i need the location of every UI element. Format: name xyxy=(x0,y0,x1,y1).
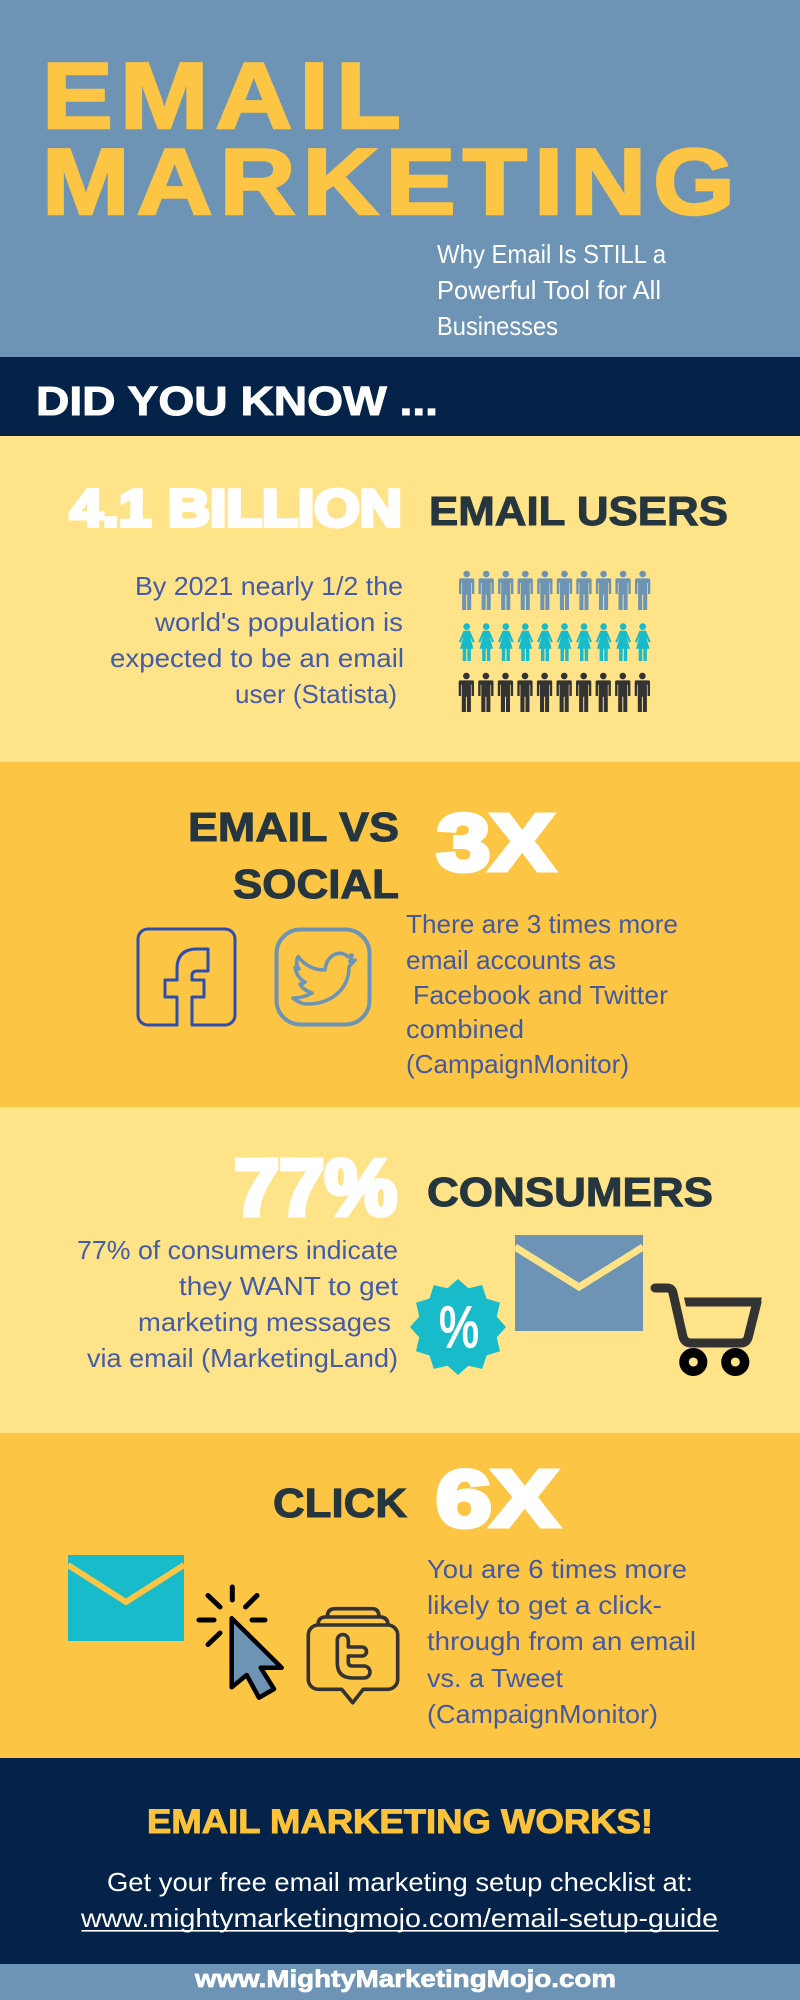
heading: email marketing works: EMAIL MARKETING WORKS! xyxy=(147,1803,653,1841)
icon: row of men xyxy=(459,571,650,610)
body text: 3 times more accounts: email accounts as xyxy=(406,945,616,975)
icon: teal envelope xyxy=(68,1555,184,1641)
body text: 3 times more accounts: (CampaignMonitor) xyxy=(406,1049,629,1079)
panel: click 6x xyxy=(0,1433,800,1758)
icon: twitter xyxy=(276,930,370,1024)
icon: shopping cart xyxy=(655,1288,762,1371)
body text: consumers want email xyxy=(77,1235,399,1373)
title: EMAIL xyxy=(42,43,408,148)
body text: population: By 2021 nearly 1/2 the xyxy=(135,571,403,601)
title: MARKETING xyxy=(42,129,742,234)
heading: consumers: CONSUMERS xyxy=(427,1169,713,1215)
body text: click-through: through from an email xyxy=(427,1626,696,1656)
icon: facebook xyxy=(138,929,235,1025)
body text: 3 times more accounts: Facebook and Twitter xyxy=(413,980,668,1010)
body text: population: world's population is xyxy=(154,607,403,637)
text: website: www.MightyMarketingMojo.com xyxy=(194,1966,616,1993)
icon: row of women xyxy=(459,623,651,661)
body text: 3 times more accounts: combined xyxy=(406,1014,524,1044)
body text: click-through: vs. a Tweet xyxy=(427,1663,564,1693)
icon: discount badge: % xyxy=(439,1295,479,1360)
body text: consumers want email: via email (MarketingLand) xyxy=(87,1343,398,1373)
body text: click-through: You are 6 times more xyxy=(427,1554,687,1584)
heading: email vs social: SOCIAL xyxy=(233,861,399,907)
subtitle: Powerful Tool for All xyxy=(437,275,661,305)
text: checklist invitation: Get your free email marketing setup checklist at: xyxy=(107,1867,693,1897)
heading: email users: EMAIL USERS xyxy=(429,488,728,534)
body text: click-through: (CampaignMonitor) xyxy=(427,1699,658,1729)
panel: 77% consumers xyxy=(0,1107,800,1433)
panel: website strip xyxy=(0,1964,800,2000)
heading: email vs social xyxy=(188,804,399,907)
body text: click-through: likely to get a click- xyxy=(427,1590,662,1620)
body text: population xyxy=(110,571,404,709)
heading: click: CLICK xyxy=(273,1480,407,1526)
stat: 77%: 77% xyxy=(234,1143,397,1232)
panel: 4.1 billion email users xyxy=(0,436,800,762)
panel: header xyxy=(0,0,800,357)
body text: consumers want email: marketing messages xyxy=(138,1307,391,1337)
icon: twitter speech bubble xyxy=(308,1609,398,1703)
link: setup guide: www.mightymarketingmojo.com/email-setup-guide xyxy=(80,1903,718,1933)
subtitle: Businesses xyxy=(437,311,558,341)
icon: row of dark figures xyxy=(459,673,650,712)
icon: discount badge xyxy=(410,1279,506,1375)
heading: did you know: DID YOU KNOW ... xyxy=(36,378,438,424)
body text: population: user (Statista) xyxy=(235,679,397,709)
body text: click-through xyxy=(427,1554,696,1729)
title xyxy=(42,43,742,234)
body text: 3 times more accounts: There are 3 times more xyxy=(406,909,678,939)
icon: cursor click xyxy=(199,1587,282,1698)
stat: 3X: 3X xyxy=(437,798,554,887)
body text: consumers want email: 77% of consumers indicate xyxy=(77,1235,398,1265)
body text: population: expected to be an email xyxy=(110,643,404,673)
panel: footer call to action xyxy=(0,1758,800,1964)
heading: email vs social: EMAIL VS xyxy=(188,804,399,850)
body text: consumers want email: they WANT to get xyxy=(179,1271,399,1301)
panel: email vs social xyxy=(0,762,800,1107)
subtitle xyxy=(437,239,666,341)
body text: 3 times more accounts xyxy=(406,909,678,1079)
subtitle: Why Email Is STILL a xyxy=(437,239,666,269)
stat: 6X: 6X xyxy=(436,1454,558,1543)
panel: did you know banner xyxy=(0,357,800,436)
icon: envelope xyxy=(515,1235,643,1331)
stat: 4.1 billion: 4.1 BILLION xyxy=(70,480,402,538)
